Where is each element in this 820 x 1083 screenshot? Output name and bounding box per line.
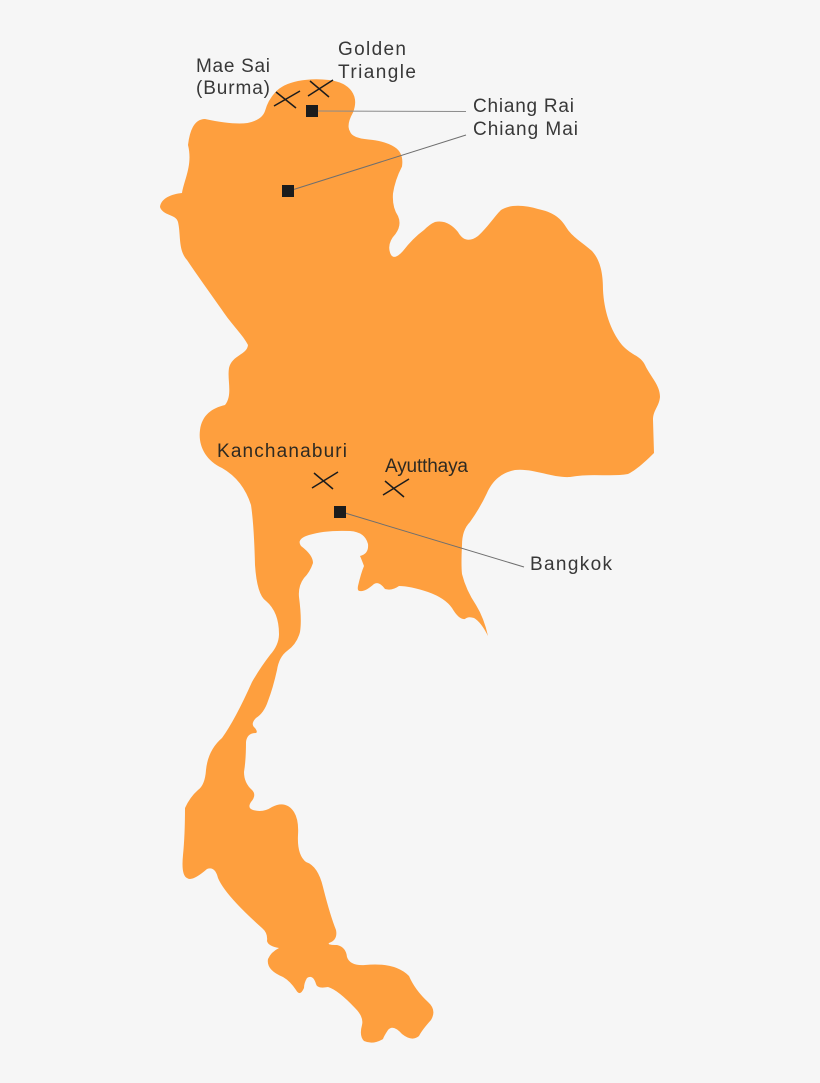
- leader line: Chiang Rai: [318, 110, 466, 112]
- label: Chiang Rai: Chiang Rai: [473, 96, 574, 117]
- map: Thailand silhouette: [160, 79, 660, 1043]
- marker: Chiang Mai square: [282, 185, 294, 197]
- label: Golden Triangle: [338, 39, 416, 83]
- label: Golden Triangle: Triangle: [338, 62, 416, 83]
- label: Kanchanaburi: Kanchanaburi: [217, 441, 347, 462]
- marker: Ayutthaya cross: [383, 479, 409, 497]
- label: Mae Sai (Burma): Mae Sai: [196, 56, 270, 77]
- marker: Kanchanaburi cross: [312, 472, 338, 489]
- label: Golden Triangle: Golden: [338, 39, 406, 60]
- leader line: Chiang Mai: [292, 135, 466, 190]
- label: Mae Sai (Burma): [196, 56, 270, 99]
- label: Ayutthaya: Ayutthaya: [385, 456, 468, 477]
- marker: Chiang Rai square: [306, 105, 318, 117]
- label: Chiang Mai: Chiang Mai: [473, 119, 578, 140]
- marker: Mae Sai cross: [274, 91, 300, 108]
- marker: Golden Triangle cross: [308, 80, 333, 97]
- label: Bangkok: Bangkok: [530, 554, 612, 575]
- leader line: Bangkok: [345, 513, 524, 567]
- marker: Bangkok square: [334, 506, 346, 518]
- label: Mae Sai (Burma): (Burma): [196, 78, 270, 99]
